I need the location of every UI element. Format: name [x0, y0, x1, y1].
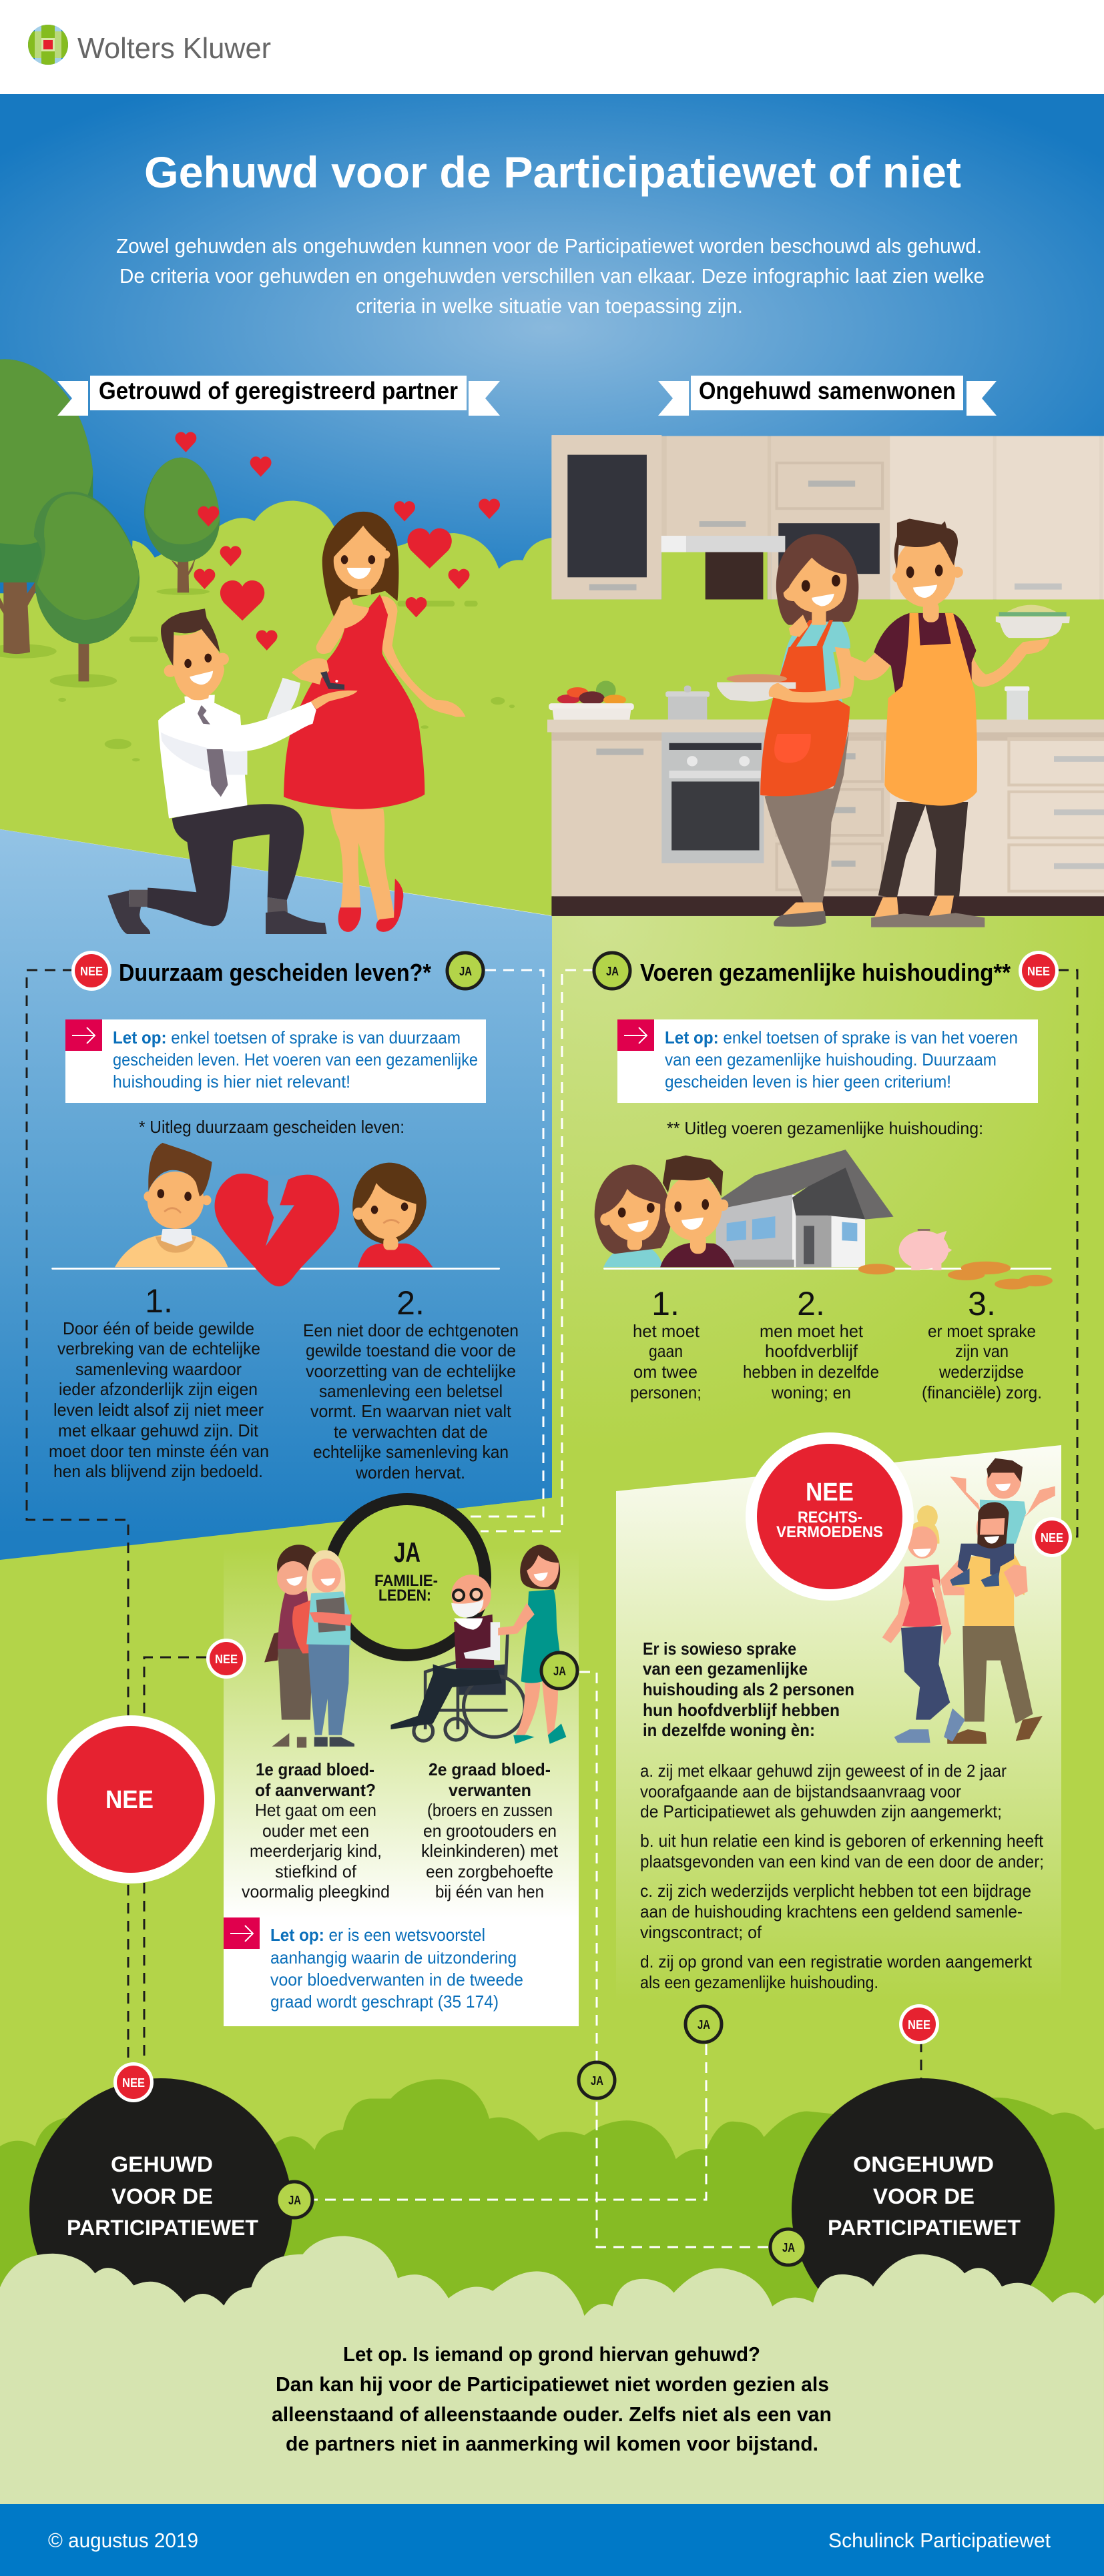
flow lines: black NEE paths — [27, 970, 1077, 2079]
numbered criterion 2 (huishouding): 2. — [797, 1285, 825, 1322]
badge: JA after rechtsvermoedens: JA — [698, 2018, 710, 2032]
sad woman — [352, 1163, 433, 1267]
house — [716, 1150, 894, 1267]
text: 2e graad bloedverwanten — [421, 1759, 559, 1901]
badge: JA top right — [594, 953, 630, 989]
numbered criterion 3 (huishouding): zijn van — [955, 1341, 1009, 1361]
numbered criterion 3 (huishouding): (financiële) zorg. — [922, 1382, 1042, 1402]
badge: JA familieleden ring: LEDEN: — [378, 1587, 431, 1605]
numbered criterion 1 (duurzaam gescheiden): met elkaar gehuwd zijn. Dit — [58, 1420, 259, 1440]
badge: JA on ongehuwd circle — [770, 2229, 806, 2265]
badge: NEE familieleden: NEE — [215, 1653, 238, 1666]
list: rechtsvermoedens a to d: aan de huishouding krachtens een geldend samenle- — [640, 1901, 1023, 1921]
numbered criterion 2 (duurzaam gescheiden): te verwachten dat de — [334, 1422, 488, 1442]
list: rechtsvermoedens a to d: plaatsgevonden van een kind van de een door de ander; — [640, 1851, 1044, 1871]
numbered criterion 2 (duurzaam gescheiden): echtelijke samenleving kan — [313, 1442, 509, 1462]
numbered criterion 1 (duurzaam gescheiden): samenleving waardoor — [75, 1359, 242, 1379]
panel: pale green bottom hedge — [0, 2236, 1104, 2504]
numbered criterion 2 (huishouding): hebben in dezelfde — [743, 1362, 879, 1382]
numbered criterion 1 (duurzaam gescheiden): hen als blijvend zijn bedoeld. — [53, 1461, 263, 1481]
header band — [28, 25, 271, 65]
text: 2e graad bloedverwanten: en grootouders en — [423, 1821, 557, 1841]
icon: arrow — [224, 1917, 260, 1949]
numbered criterion 1 (duurzaam gescheiden): leven leidt alsof zij niet meer — [53, 1400, 264, 1420]
footer brand: Schulinck Participatiewet — [828, 2529, 1051, 2552]
numbered criterion 2 (duurzaam gescheiden): vormt. En waarvan niet valt — [310, 1401, 512, 1421]
text: 2e graad bloedverwanten: 2e graad bloed- — [429, 1759, 551, 1779]
numbered criterion 2 (duurzaam gescheiden): worden hervat. — [355, 1462, 465, 1482]
back tree — [144, 458, 220, 592]
circle: ongehuwd voor de Participatiewet: PARTICIPATIEWET — [828, 2216, 1021, 2240]
front tree — [34, 492, 140, 681]
badge: NEE top left: NEE — [80, 965, 103, 978]
text: 2e graad bloedverwanten: bij één van hen — [435, 1881, 544, 1901]
callout: let op wetsvoorstel — [224, 1917, 523, 2012]
bushes: dark green hedge — [0, 2079, 1104, 2331]
callout: let op wetsvoorstel: voor bloedverwanten in de tweede — [270, 1970, 523, 1990]
intro paragraph: criteria in welke situatie van toepassing zijn. — [356, 294, 743, 318]
woman in red dress — [284, 512, 466, 932]
text: 1e graad bloed- of aanverwant — [242, 1759, 390, 1901]
lawn patches — [0, 588, 515, 761]
text: er is sowieso sprake: Er is sowieso sprake — [643, 1639, 796, 1659]
callout: let op wetsvoorstel: graad wordt geschrapt (35 174) — [270, 1992, 499, 2012]
intro paragraph: Zowel gehuwden als ongehuwden kunnen voor de Participatiewet worden beschouwd als gehuwd. — [116, 234, 982, 258]
circle: ongehuwd voor de Participatiewet — [792, 2078, 1055, 2341]
badge: NEE on gehuwd circle — [113, 2062, 154, 2102]
text: 2e graad bloedverwanten: verwanten — [449, 1780, 531, 1800]
green base background — [0, 916, 1104, 2504]
footer — [0, 2504, 1104, 2576]
panel: left blue criteria background — [0, 829, 552, 1560]
badge: NEE on gehuwd circle: NEE — [122, 2076, 145, 2090]
numbered criterion 1 (huishouding): personen; — [630, 1382, 702, 1402]
text: er is sowieso sprake: in dezelfde woning èn: — [643, 1720, 815, 1740]
closing note: Let op. Is iemand op grond hiervan gehuwd? — [343, 2342, 760, 2366]
numbered criterion 3 (huishouding): er moet sprake — [928, 1321, 1036, 1341]
flow lines: white JA paths — [314, 970, 771, 2247]
numbered criterion 1 (duurzaam gescheiden): Door één of beide gewilde — [63, 1318, 254, 1338]
closing note: Dan kan hij voor de Participatiewet niet worden gezien als — [276, 2373, 829, 2396]
numbered criterion 2 (huishouding): hoofdverblijf — [765, 1341, 858, 1361]
callout: let op wetsvoorstel: aanhangig waarin de uitzondering — [270, 1948, 517, 1968]
badge: JA top left — [447, 953, 483, 989]
badge: NEE rechtsvermoedens — [746, 1432, 914, 1601]
text: 2e graad bloedverwanten: kleinkinderen) met — [421, 1841, 559, 1861]
list: rechtsvermoedens a to d: de Participatiewet als gehuwden zijn aangemerkt; — [640, 1801, 1002, 1821]
banner: Ongehuwd samenwonen: Ongehuwd samenwonen — [699, 377, 956, 404]
kitchen backsplash and cooker hood — [547, 536, 1104, 720]
footer date: © augustus 2019 — [48, 2529, 198, 2552]
badge: NEE top right: NEE — [1027, 965, 1050, 978]
sad man — [115, 1143, 228, 1267]
logo wordmark: Wolters Kluwer — [77, 32, 271, 65]
text: er is sowieso sprake — [643, 1639, 854, 1740]
callout: let op duurzaam gescheiden leven: gescheiden leven. Het voeren van een gezamenlijke — [113, 1049, 478, 1069]
text: 1e graad bloed- of aanverwant: Het gaat om een — [255, 1800, 376, 1820]
list: rechtsvermoedens a to d: vingscontract; of — [640, 1922, 762, 1942]
numbered criterion 2 (duurzaam gescheiden): gewilde toestand die voor de — [306, 1340, 516, 1360]
badge: NEE familieleden — [206, 1639, 246, 1679]
blonde daughter figure — [292, 1550, 354, 1747]
numbered criterion 2 (huishouding) — [743, 1285, 879, 1402]
numbered criterion 2 (duurzaam gescheiden): voorzetting van de echtelijke — [306, 1361, 516, 1381]
numbered criterion 1 (duurzaam gescheiden): verbreking van de echtelijke — [57, 1338, 260, 1358]
numbered criterion 1 (huishouding): gaan — [649, 1341, 683, 1361]
text: 1e graad bloed- of aanverwant: of aanverwant? — [255, 1780, 376, 1800]
callout: let op gezamenlijke huishouding: van een gezamenlijke huishouding. Duurzaam — [665, 1049, 997, 1069]
badge: NEE top left — [71, 951, 111, 991]
badge: JA on gehuwd circle: JA — [288, 2194, 301, 2207]
callout: let op duurzaam gescheiden leven: huishouding is hier niet relevant! — [113, 1071, 350, 1092]
numbered criterion 1 (duurzaam gescheiden): ieder afzonderlijk zijn eigen — [59, 1379, 258, 1399]
list: rechtsvermoedens a to d: a. zij met elkaar gehuwd zijn geweest of in de 2 jaar — [640, 1761, 1007, 1781]
numbered criterion 1 (huishouding): 1. — [651, 1285, 679, 1322]
badge: JA middle — [579, 2062, 615, 2098]
illustration: two women, first degree relatives — [264, 1545, 566, 1748]
blue sky background — [0, 94, 1104, 628]
text: 2e graad bloedverwanten: (broers en zussen — [427, 1800, 553, 1820]
list: rechtsvermoedens a to d — [640, 1761, 1044, 1992]
man portrait — [660, 1156, 734, 1267]
list: rechtsvermoedens a to d: als een gezamenlijke huishouding. — [640, 1972, 878, 1992]
icon: arrow — [65, 1019, 102, 1051]
numbered criterion 1 (huishouding): om twee — [633, 1362, 698, 1382]
heading: Voeren gezamenlijke huishouding: Voeren gezamenlijke huishouding** — [640, 959, 1011, 986]
man with orange apron — [838, 519, 1070, 927]
scene: proposal in the park — [0, 359, 554, 916]
numbered criterion 2 (duurzaam gescheiden): samenleving een beletsel — [319, 1381, 503, 1401]
nurse — [498, 1545, 566, 1744]
icon: arrow — [617, 1019, 654, 1051]
kitchen counter with fruit bowl and pot — [547, 681, 1104, 732]
closing note: de partners niet in aanmerking wil komen voor bijstand. — [286, 2432, 818, 2455]
badge: JA top left: JA — [459, 965, 472, 978]
intro paragraph: De criteria voor gehuwden en ongehuwden verschillen van elkaar. Deze infographic laat zien welke — [119, 264, 985, 288]
circle: gehuwd voor de Participatiewet: PARTICIPATIEWET — [67, 2216, 258, 2240]
text: 1e graad bloed- of aanverwant: ouder met een — [262, 1821, 369, 1841]
panel: rechtsvermoedens — [616, 1445, 1061, 2002]
callout: let op gezamenlijke huishouding — [617, 1019, 1038, 1103]
big left tree — [0, 359, 93, 654]
circle: ongehuwd voor de Participatiewet: ONGEHUWD — [853, 2152, 994, 2176]
subheading: uitleg voeren gezamenlijke huishouding: ** Uitleg voeren gezamenlijke huishouding: — [667, 1118, 983, 1138]
closing note — [272, 2342, 832, 2455]
panel: right green criteria background — [552, 916, 1104, 1517]
badge: NEE after rechtsvermoedens — [899, 2004, 939, 2044]
numbered criterion 2 (duurzaam gescheiden): Een niet door de echtgenoten — [303, 1320, 519, 1340]
badge: NEE rechtsvermoedens: RECHTS- — [798, 1509, 862, 1527]
illustration: family with child on shoulders — [882, 1458, 1055, 1744]
icon: broken heart — [215, 1174, 339, 1286]
mother figure — [264, 1545, 320, 1748]
badge: JA on gehuwd circle — [276, 2182, 312, 2218]
banner: Getrouwd of geregistreerd partner: Getrouwd of geregistreerd partner — [99, 377, 458, 404]
lawn and bushes — [0, 501, 554, 916]
badge: JA familieleden ring: FAMILIE- — [374, 1572, 438, 1590]
heading: Duurzaam gescheiden leven: Duurzaam gescheiden leven?* — [119, 959, 431, 986]
kneeling man — [107, 608, 358, 934]
woman with red apron — [717, 534, 858, 927]
numbered criterion 3 (huishouding) — [922, 1285, 1042, 1402]
numbered criterion 2 (huishouding): woning; en — [771, 1382, 851, 1402]
badge: NEE rechtsvermoedens: VERMOEDENS — [776, 1523, 883, 1541]
numbered criterion 1 (huishouding): het moet — [633, 1321, 700, 1341]
callout: let op gezamenlijke huishouding: Let op: enkel toetsen of sprake is van het voeren — [665, 1027, 1018, 1047]
numbered criterion 3 (huishouding): 3. — [968, 1285, 996, 1322]
intro paragraph — [116, 234, 985, 318]
badge: NEE rechtsvermoedens: NEE — [806, 1478, 854, 1507]
numbered criterion 3 (huishouding): wederzijdse — [938, 1362, 1024, 1382]
icon: coins — [858, 1262, 1053, 1290]
text: er is sowieso sprake: van een gezamenlijke — [643, 1659, 808, 1679]
flow lines over hedge — [314, 2102, 771, 2247]
main title: Gehuwd voor de Participatiewet of niet — [144, 147, 961, 197]
kitchen upper cabinets — [551, 435, 1104, 599]
banner: Ongehuwd samenwonen — [658, 376, 997, 416]
illustration: woman and kneeling man with ring — [107, 512, 466, 934]
callout: let op wetsvoorstel: Let op: er is een wetsvoorstel — [270, 1925, 485, 1945]
list: rechtsvermoedens a to d: b. uit hun relatie een kind is geboren of erkenning heeft — [640, 1831, 1044, 1851]
numbered criterion 1 (duurzaam gescheiden): 1. — [145, 1282, 173, 1320]
text: er is sowieso sprake: hun hoofdverblijf hebben — [643, 1700, 840, 1720]
circle: gehuwd voor de Participatiewet: VOOR DE — [111, 2184, 213, 2208]
numbered criterion 2 (duurzaam gescheiden): 2. — [396, 1284, 425, 1322]
scene: kitchen with couple — [547, 435, 1104, 927]
circle: ongehuwd voor de Participatiewet: VOOR DE — [873, 2184, 975, 2208]
icon: Wolters Kluwer globe logo — [28, 25, 68, 65]
text: 1e graad bloed- of aanverwant: stiefkind of — [275, 1861, 357, 1881]
badge: large NEE left: NEE — [105, 1786, 154, 1814]
badge: JA familieleden ring: JA — [394, 1537, 421, 1568]
mother — [882, 1505, 965, 1743]
banner: Getrouwd of geregistreerd partner — [57, 376, 500, 416]
circle: gehuwd voor de Participatiewet: GEHUWD — [111, 2152, 213, 2176]
father and child — [940, 1458, 1055, 1744]
numbered criterion 2 (duurzaam gescheiden) — [303, 1284, 519, 1482]
badge: JA familieleden ring — [329, 1499, 485, 1655]
badge: NEE to rechtsvermoedens — [1032, 1517, 1072, 1557]
badge: NEE to rechtsvermoedens: NEE — [1041, 1531, 1063, 1545]
hearts — [175, 432, 500, 651]
text: er is sowieso sprake: huishouding als 2 personen — [643, 1679, 854, 1699]
badge: NEE after rechtsvermoedens: NEE — [908, 2018, 930, 2032]
illustration: separated couple with broken heart — [51, 1143, 500, 1286]
badge: large NEE left — [47, 1715, 215, 1883]
text: 1e graad bloed- of aanverwant: 1e graad bloed- — [256, 1759, 374, 1779]
numbered criterion 1 (duurzaam gescheiden) — [49, 1282, 269, 1481]
woman portrait — [595, 1165, 671, 1267]
text: 2e graad bloedverwanten: een zorgbehoefte — [426, 1861, 553, 1881]
callout: let op gezamenlijke huishouding: gescheiden leven is hier geen criterium! — [665, 1071, 951, 1092]
illustration: couple, house, piggy bank and coins — [595, 1150, 1053, 1290]
numbered criterion 2 (huishouding): men moet het — [760, 1321, 864, 1341]
panel: familieleden — [224, 1494, 579, 2026]
numbered criterion 1 (huishouding) — [630, 1285, 702, 1402]
callout: let op duurzaam gescheiden leven: Let op: enkel toetsen of sprake is van duurzaam — [113, 1027, 461, 1047]
callout: let op duurzaam gescheiden leven — [65, 1019, 486, 1103]
circle: gehuwd voor de Participatiewet — [29, 2078, 292, 2341]
old man in wheelchair — [390, 1575, 525, 1741]
list: rechtsvermoedens a to d: d. zij op grond van een registratie worden aangemerkt — [640, 1952, 1033, 1972]
closing note: alleenstaand of alleenstaande ouder. Zelfs niet als een van — [272, 2403, 832, 2426]
text: 1e graad bloed- of aanverwant: meerderjarig kind, — [250, 1841, 382, 1861]
badge: JA middle: JA — [591, 2074, 603, 2088]
badge: JA familieleden: JA — [553, 1665, 566, 1678]
icon: piggy bank — [899, 1229, 952, 1270]
badge: JA familieleden — [541, 1653, 577, 1689]
badge: JA on ongehuwd circle: JA — [782, 2241, 795, 2254]
list: rechtsvermoedens a to d: c. zij zich wederzijds verplicht hebben tot een bijdrage — [640, 1881, 1031, 1901]
subheading: uitleg duurzaam gescheiden leven: * Uitleg duurzaam gescheiden leven: — [139, 1117, 404, 1137]
kitchen lower cabinets and oven — [551, 732, 1104, 916]
list: rechtsvermoedens a to d: voorafgaande aan de bijstandsaanvraag voor — [640, 1781, 961, 1801]
badge: JA after rechtsvermoedens — [685, 2006, 722, 2042]
badge: NEE top right — [1019, 951, 1059, 991]
numbered criterion 1 (duurzaam gescheiden): moet door ten minste één van — [49, 1441, 269, 1461]
text: 1e graad bloed- of aanverwant: voormalig pleegkind — [242, 1881, 390, 1901]
badge: JA top right: JA — [606, 965, 619, 978]
